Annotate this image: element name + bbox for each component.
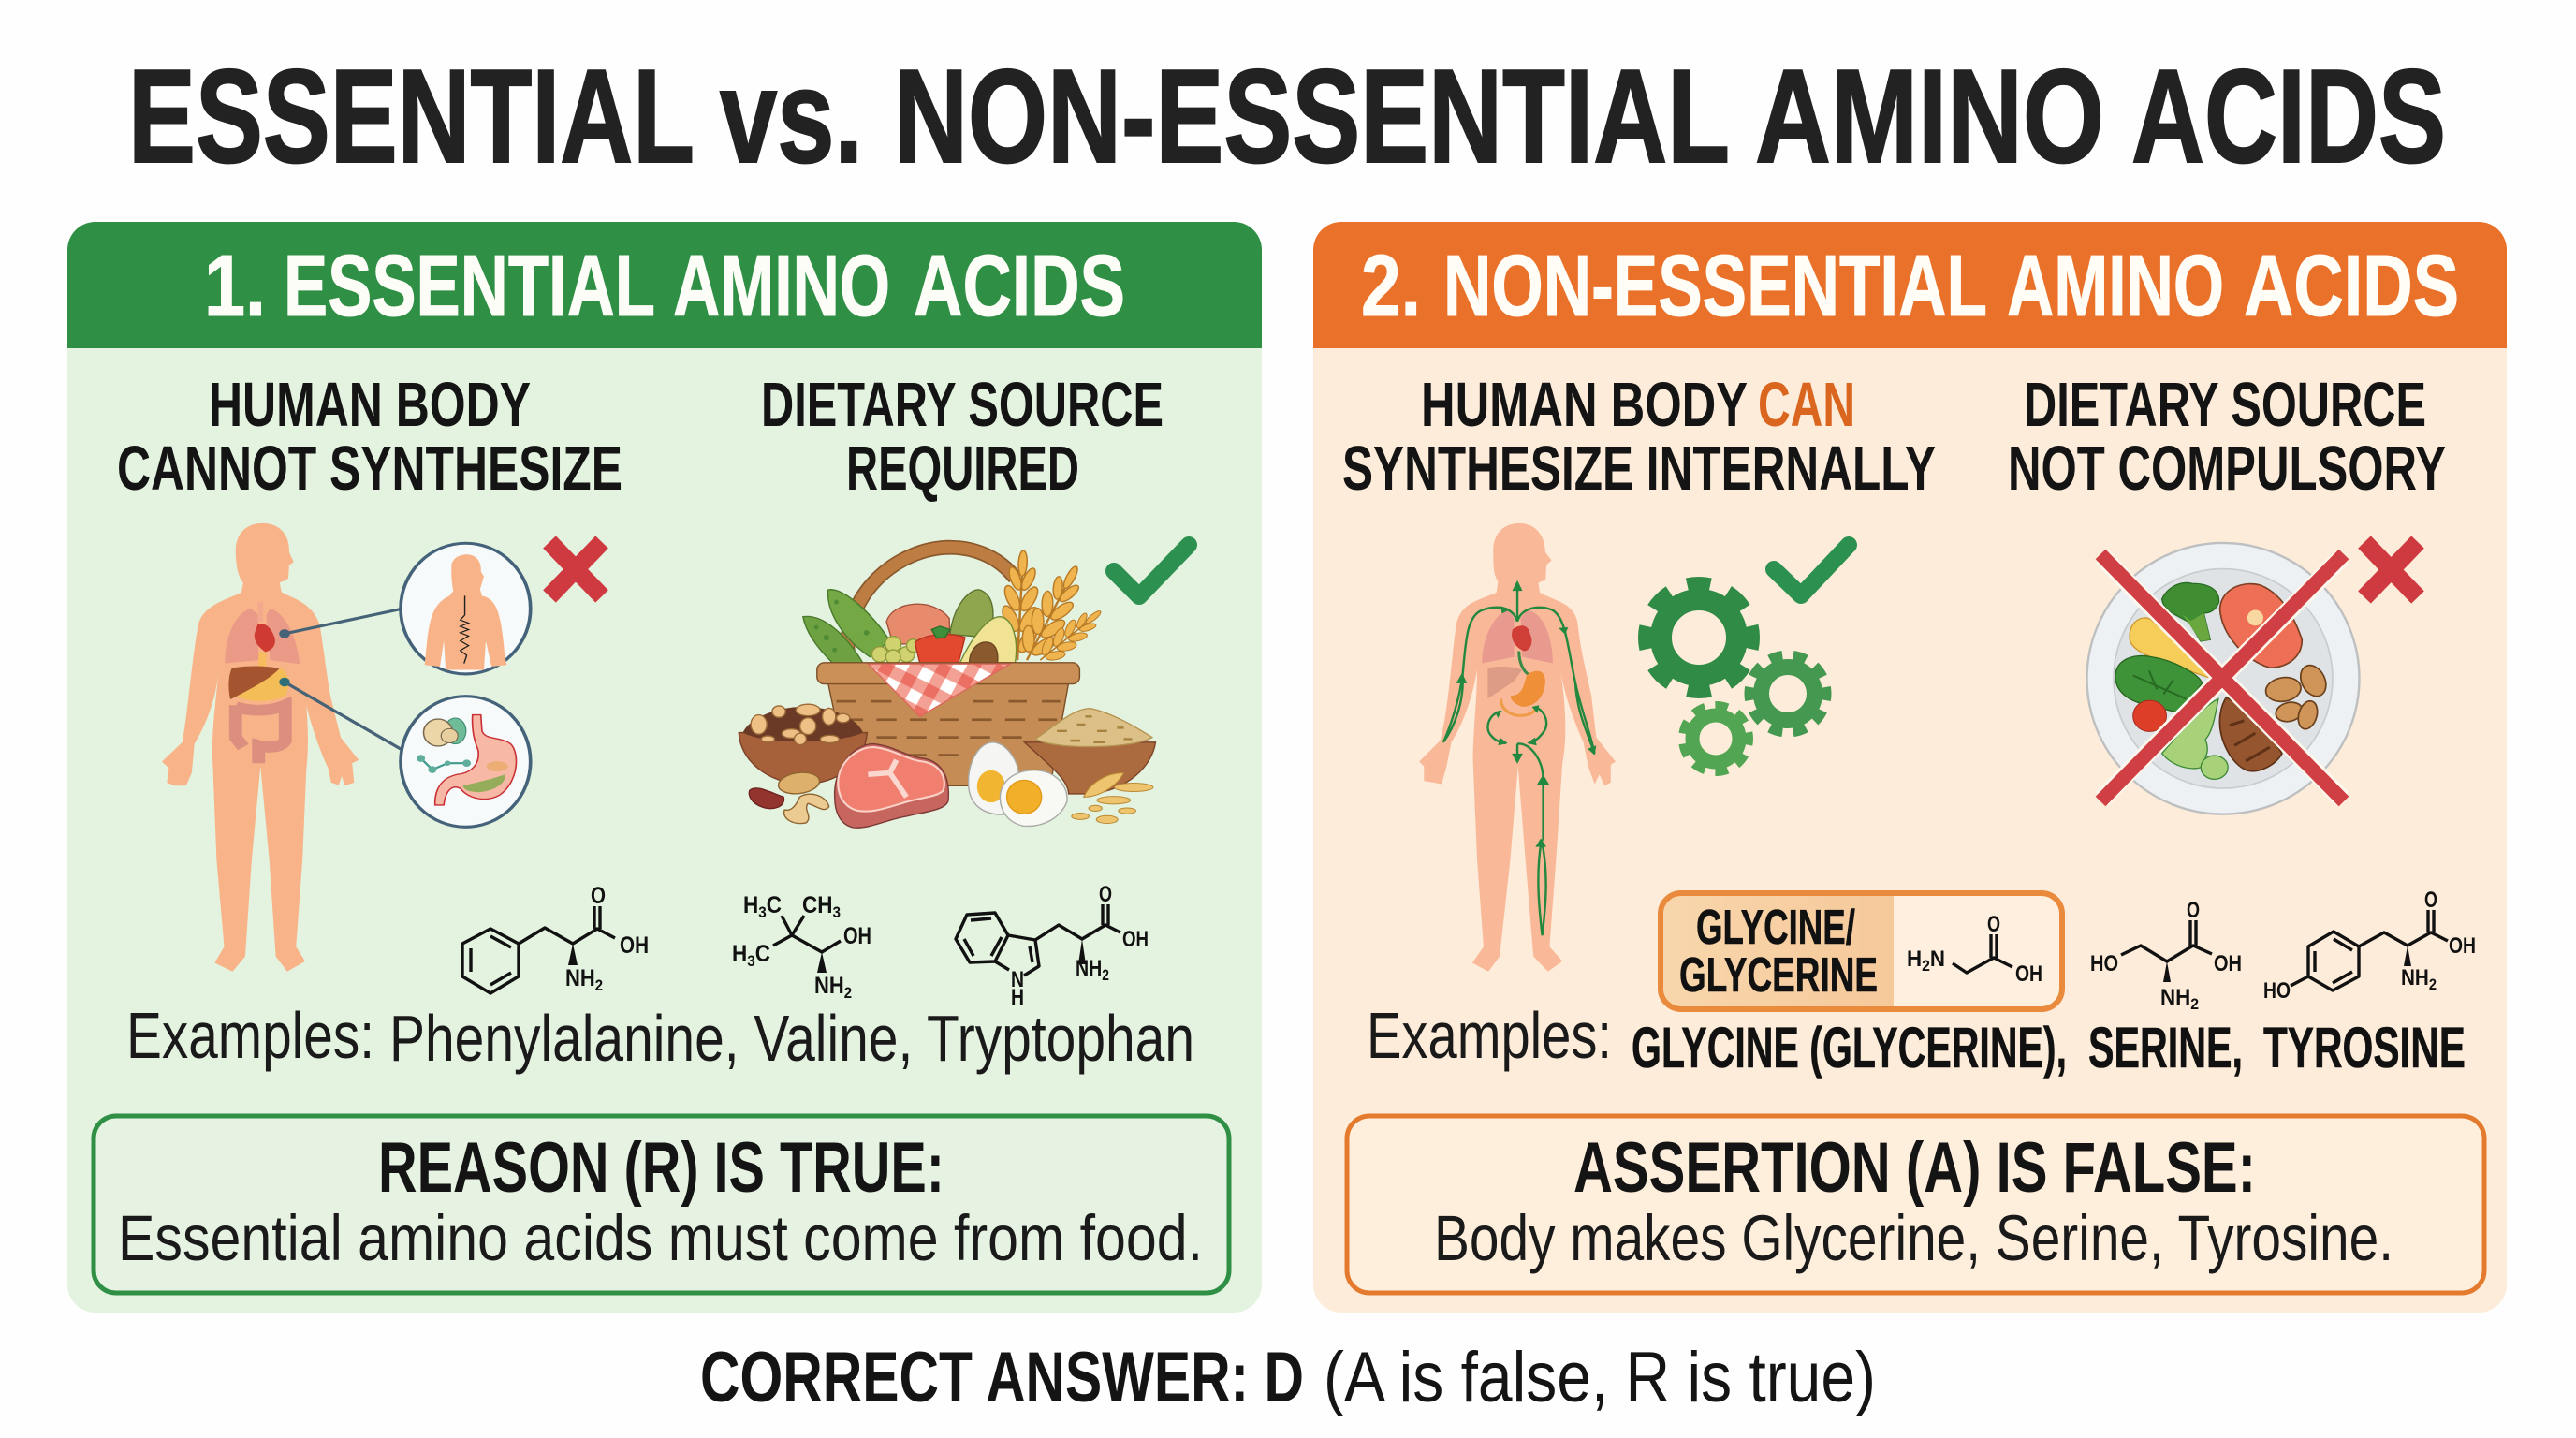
examples text: essential: Phenylalanine, Valine, Tryptophan — [389, 1002, 1194, 1075]
icon: green check — [1774, 545, 1849, 595]
icon: red cross — [2364, 542, 2418, 597]
examples text: non-essential: GLYCINE (GLYCERINE), — [1632, 1016, 2067, 1079]
examples text: essential: Examples: — [126, 999, 374, 1072]
molecule: valine — [732, 892, 871, 1002]
molecule: tyrosine: O — [2424, 888, 2437, 913]
lungs — [225, 609, 300, 664]
red cross lines — [2100, 554, 2344, 801]
molecule: glycine: 2 — [1922, 957, 1930, 975]
tomato — [915, 635, 965, 664]
correct answer line: (A is false, R is true) — [1324, 1338, 1876, 1417]
heading: dietary source required: REQUIRED — [846, 433, 1079, 504]
callout: glycine label with structure: GLYCINE/ — [1696, 901, 1855, 955]
callout: glycine label with structure — [1661, 893, 2062, 1009]
heading: dietary source not compulsory — [2008, 370, 2446, 504]
panel header: essential: 1. — [204, 237, 266, 334]
correct answer line — [700, 1338, 1876, 1417]
icon: crossed out plate of food — [2086, 543, 2360, 814]
medium gear — [1750, 656, 1825, 731]
molecule: tyrosine: NH — [2401, 965, 2434, 990]
molecule: tryptophan: O — [1099, 882, 1112, 907]
molecule: valine: C — [767, 892, 782, 918]
title: ESSENTIAL — [128, 42, 695, 191]
large gear — [1646, 584, 1752, 691]
callout: glycine label with structure: GLYCERINE — [1679, 948, 1878, 1003]
panel: non-essential amino acids — [1313, 222, 2507, 1313]
molecule: phenylalanine — [462, 883, 649, 994]
steak — [2219, 697, 2282, 771]
molecule: glycine: H — [1907, 946, 1923, 972]
panel header: non-essential: AMINO — [2007, 237, 2224, 334]
eggs — [969, 742, 1018, 814]
cheese / corn — [2130, 618, 2212, 679]
icon: human body with green synthesis pathways — [1419, 523, 1616, 972]
small gear — [1684, 707, 1748, 770]
intestine — [236, 705, 285, 763]
molecule: tryptophan — [956, 882, 1149, 1010]
heart — [255, 624, 275, 653]
grain sprig — [1072, 773, 1153, 824]
basket body — [828, 682, 1069, 785]
heading: human body can synthesize internally — [1342, 370, 1936, 504]
panel header: essential — [67, 222, 1262, 348]
inset: stomach and molecules — [401, 697, 531, 827]
green pathways — [1443, 584, 1595, 935]
molecule: tryptophan: 2 — [1102, 966, 1109, 984]
molecule: valine: H — [743, 892, 760, 918]
molecule: valine: CH — [802, 892, 836, 918]
molecule: glycine: N — [1930, 946, 1945, 972]
panel header: non-essential: ACIDS — [2244, 237, 2459, 334]
heading: human body cannot synthesize — [117, 370, 622, 504]
molecule: serine: O — [2187, 898, 2200, 923]
title: NON-ESSENTIAL — [894, 42, 1730, 191]
panel header: essential: AMINO — [673, 237, 890, 334]
molecule: glycine: OH — [2015, 961, 2042, 987]
molecule: tyrosine — [2263, 888, 2476, 1004]
steak — [835, 744, 948, 828]
icon: green check — [1114, 545, 1189, 596]
heading: dietary source required — [761, 370, 1164, 504]
almonds — [2263, 661, 2331, 731]
panel header: non-essential — [1313, 222, 2507, 348]
title — [128, 42, 2446, 191]
molecule: serine: NH — [2160, 985, 2193, 1010]
molecule: phenylalanine: 2 — [595, 976, 603, 994]
heading: dietary source not compulsory: DIETARY SOURCE — [2024, 370, 2426, 440]
molecule: tryptophan: OH — [1122, 927, 1149, 952]
avocado half — [960, 617, 1017, 663]
molecule: valine: 3 — [747, 952, 755, 970]
examples text: essential — [126, 999, 1194, 1075]
molecule: tryptophan: H — [1011, 985, 1024, 1010]
tomato — [2133, 700, 2166, 731]
lungs — [1482, 610, 1553, 664]
checked cloth — [868, 664, 1010, 716]
molecule: tryptophan: N — [1011, 967, 1024, 992]
loose nuts — [777, 770, 821, 796]
molecule: serine — [2090, 898, 2242, 1013]
molecule: valine: 2 — [844, 984, 852, 1002]
callout: assertion is false — [1347, 1116, 2484, 1293]
callout: assertion is false: Body makes Glycerine, Serine, Tyrosine. — [1434, 1202, 2393, 1274]
molecule: phenylalanine: O — [591, 883, 606, 909]
heading: dietary source required: DIETARY SOURCE — [761, 370, 1164, 440]
panel header: non-essential: NON-ESSENTIAL — [1443, 237, 1987, 334]
spinach leaf — [2115, 656, 2203, 712]
heading: human body cannot synthesize: CANNOT SYNTHESIZE — [117, 433, 622, 504]
examples text: non-essential: SERINE, — [2088, 1016, 2243, 1079]
examples text: non-essential — [1367, 999, 2466, 1079]
molecule: tyrosine: OH — [2449, 933, 2476, 959]
molecule: valine: OH — [843, 923, 871, 949]
molecule: valine: H — [732, 941, 749, 967]
heading: human body can synthesize internally: CAN — [1758, 370, 1855, 440]
molecule: valine: 3 — [758, 903, 767, 921]
molecule: valine: NH — [814, 973, 848, 999]
connector lines — [285, 609, 402, 750]
callout: reason is true: Essential amino acids must come from food. — [118, 1202, 1203, 1274]
heading: human body cannot synthesize: HUMAN BODY — [209, 370, 531, 440]
molecule: glycine: O — [1987, 912, 2000, 937]
inset: body with spine — [401, 543, 531, 674]
panel: essential amino acids — [67, 222, 1262, 1313]
nut bowl — [739, 733, 867, 785]
molecule: serine: HO — [2090, 951, 2118, 976]
molecule: serine: OH — [2214, 951, 2242, 976]
icon: red cross — [549, 542, 602, 596]
heading: human body can synthesize internally: SYNTHESIZE INTERNALLY — [1342, 433, 1936, 504]
liver and stomach — [236, 668, 288, 701]
title: vs. — [720, 42, 863, 191]
molecule: tyrosine: HO — [2263, 978, 2291, 1004]
title: AMINO — [1755, 42, 2104, 191]
icon: gears — [1646, 584, 1825, 770]
salmon slice — [2220, 584, 2302, 668]
molecule: tyrosine: 2 — [2429, 976, 2437, 993]
examples text: non-essential: TYROSINE — [2263, 1016, 2466, 1079]
correct answer line: CORRECT ANSWER: D — [700, 1338, 1304, 1417]
molecule: phenylalanine: OH — [620, 932, 649, 959]
molecule: phenylalanine: NH — [565, 965, 599, 991]
panel header: essential: ESSENTIAL — [284, 237, 655, 334]
icon: human body with organs — [162, 523, 531, 972]
molecule: glycine — [1907, 912, 2042, 987]
molecule: tryptophan: NH — [1076, 956, 1108, 981]
examples text: non-essential: Examples: — [1367, 999, 1612, 1072]
callout: reason is true — [94, 1116, 1229, 1293]
panel header: non-essential: 2. — [1361, 237, 1421, 334]
cucumber — [2162, 698, 2218, 769]
molecule: valine: 3 — [832, 903, 841, 921]
heading: human body can synthesize internally: HUMAN BODY — [1421, 370, 1748, 440]
title: ACIDS — [2131, 42, 2446, 191]
grapes — [871, 637, 920, 664]
panel header: essential: ACIDS — [914, 237, 1125, 334]
pathway arrowheads — [1456, 580, 1596, 847]
molecule: valine: C — [755, 941, 770, 967]
broccoli — [2162, 583, 2219, 641]
wheat — [996, 550, 1110, 671]
stomach — [1519, 651, 1529, 675]
icon: food basket — [739, 548, 1155, 828]
callout: reason is true: REASON (R) IS TRUE: — [378, 1128, 944, 1208]
grain bowl — [1025, 742, 1155, 794]
heart — [1512, 625, 1531, 651]
callout: assertion is false: ASSERTION (A) IS FALSE: — [1573, 1128, 2256, 1208]
molecule: serine: 2 — [2190, 995, 2199, 1013]
